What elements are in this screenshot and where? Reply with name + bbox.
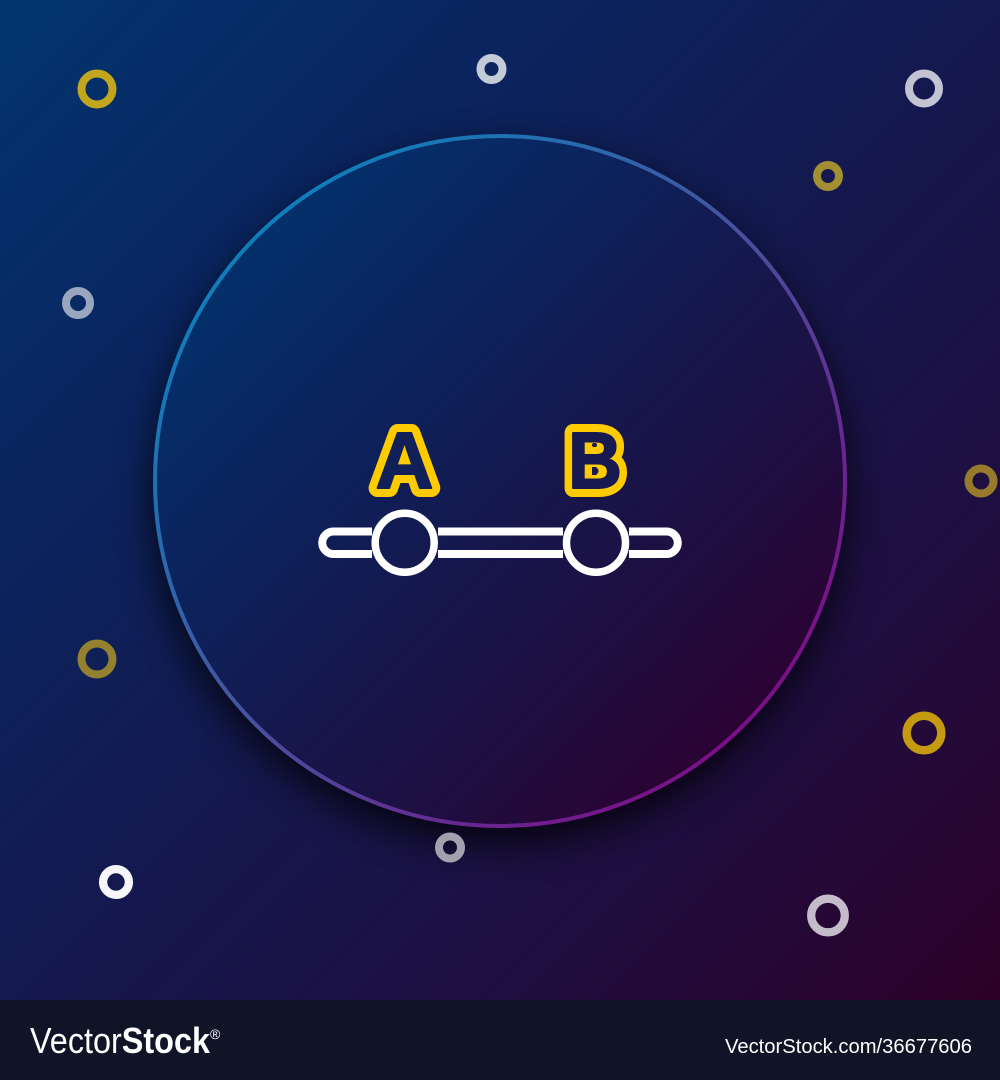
footer logo: VectorStock xyxy=(30,1020,211,1061)
letter B: B xyxy=(568,416,622,505)
slider track xyxy=(322,532,678,554)
registered mark: ® xyxy=(210,1026,221,1042)
decorative rings xyxy=(66,58,994,932)
footer image id: VectorStock.com/36677606 xyxy=(725,1035,972,1058)
slider handle B xyxy=(566,513,626,572)
letter B: B xyxy=(568,416,622,505)
main circle panel xyxy=(153,136,847,844)
footer bar xyxy=(0,1000,1000,1080)
slider handle A xyxy=(375,513,434,572)
letter A: A xyxy=(376,416,433,505)
letter A: A xyxy=(376,416,433,505)
icon: A to B slider xyxy=(322,416,678,572)
